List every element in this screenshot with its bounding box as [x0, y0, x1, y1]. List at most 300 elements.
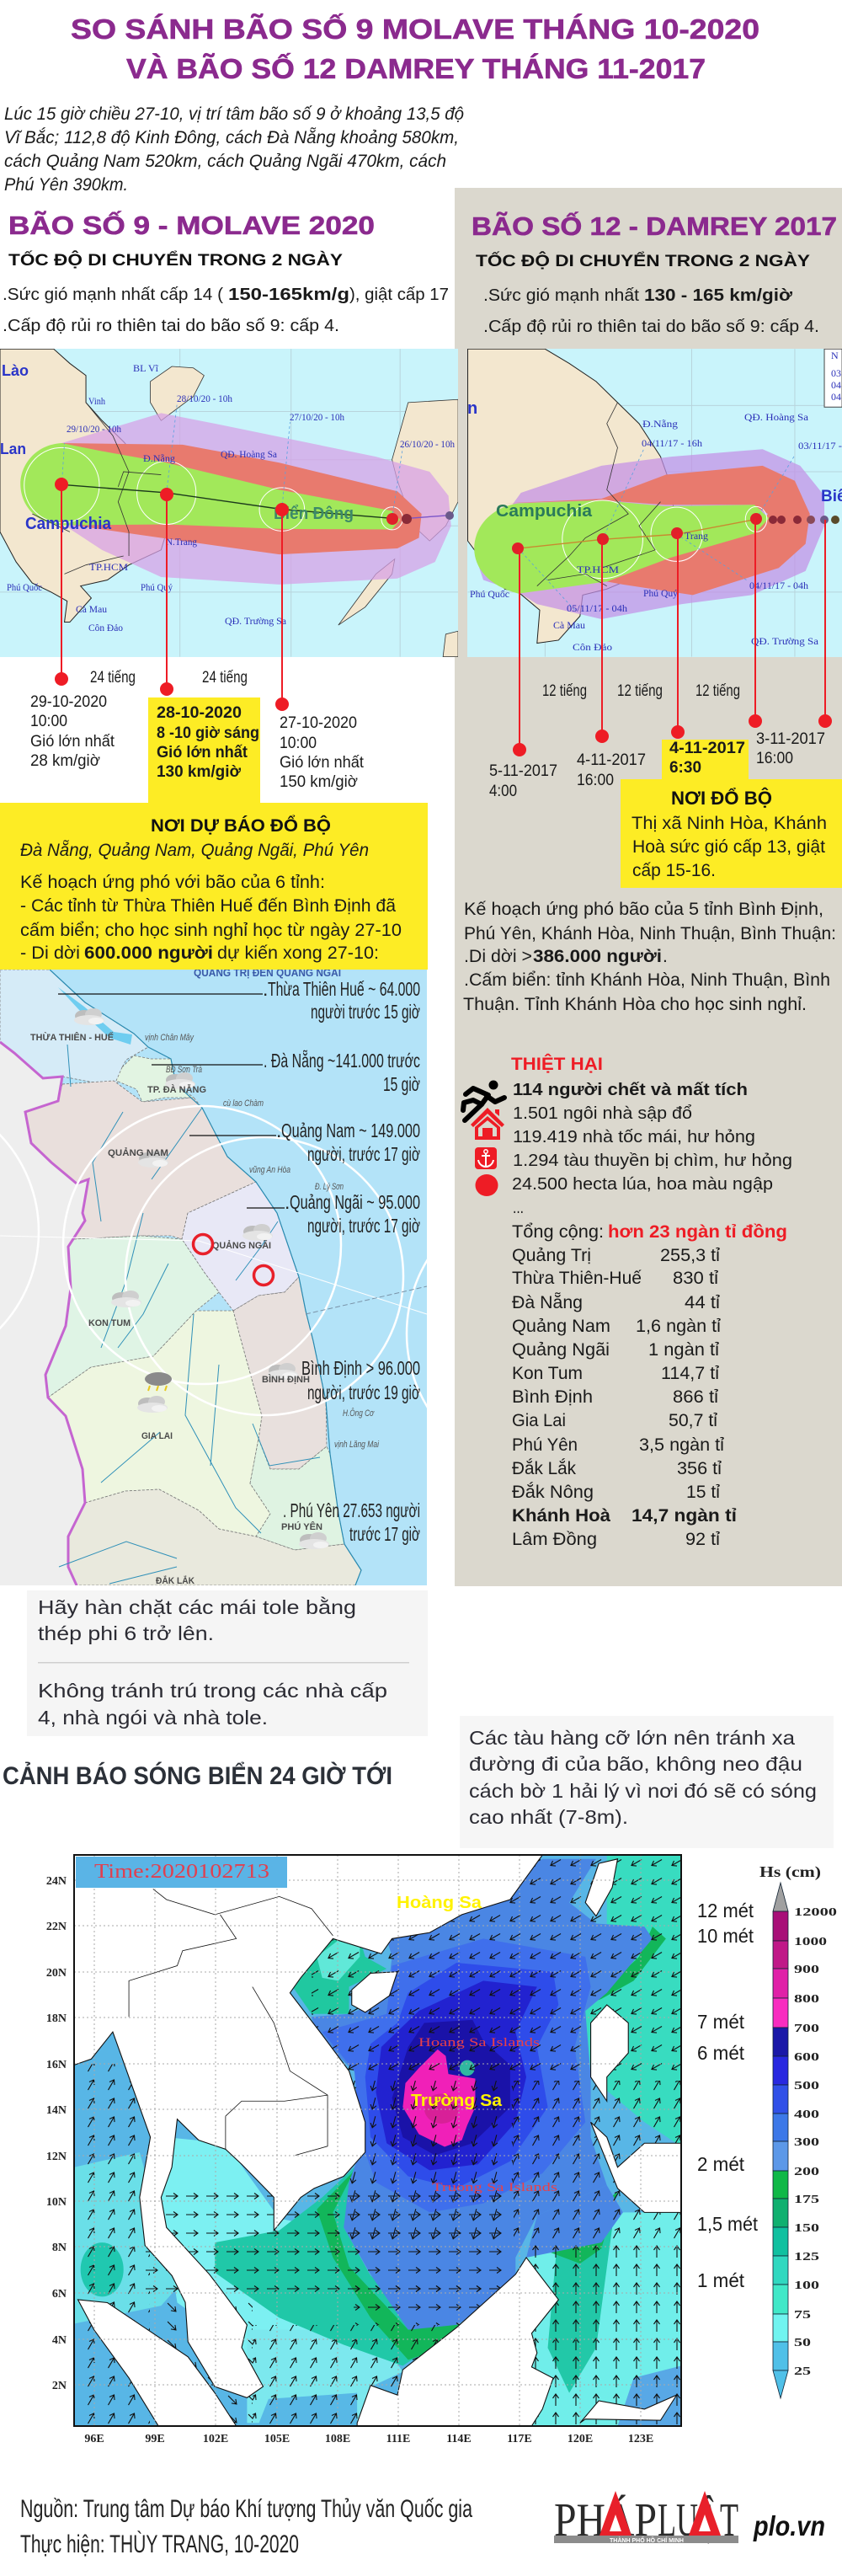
heading: Damrey: BÃO SỐ 12 - DAMREY 2017	[472, 211, 837, 241]
province labels: QUẢNG NGÃI	[212, 1240, 271, 1251]
icon: running person	[463, 1080, 504, 1120]
longitude labels: 105E	[264, 2433, 290, 2445]
coast	[50, 970, 361, 1585]
time box: Time:2020102713	[94, 1861, 269, 1883]
callout: roof advice: Hãy hàn chặt các mái tole bằng	[38, 1596, 356, 1618]
cost by province: Quảng Nam	[512, 1317, 610, 1336]
province labels: QUẢNG TRỊ ĐẾN QUẢNG NGÃI	[194, 966, 341, 979]
latitude labels: 16N	[46, 2059, 67, 2071]
map labels: Campuchia	[496, 502, 593, 521]
logo: Pháp Luật	[554, 2491, 738, 2547]
response plan: 600.000 người	[84, 943, 213, 963]
Damrey landfall text	[632, 788, 827, 880]
callout: roof advice: Không tránh trú trong các nhà cấp	[38, 1680, 387, 1702]
wind radius arcs	[0, 1105, 427, 1417]
longitude labels: 102E	[203, 2433, 228, 2445]
cost by province: 356 tỉ	[677, 1459, 722, 1478]
province labels: vũng An Hòa	[249, 1165, 290, 1175]
cost by province: 255,3 tỉ	[660, 1246, 720, 1265]
map labels: Trang	[685, 530, 708, 542]
intro text	[4, 104, 464, 195]
longitude labels: 114E	[446, 2433, 472, 2445]
duration labels: 24 tiếng	[90, 669, 136, 687]
cost by province: Kon Tum	[512, 1364, 583, 1383]
dots	[55, 478, 289, 711]
cost by province: 3,5 ngàn tỉ	[639, 1435, 724, 1455]
metre labels: 12 mét	[697, 1900, 754, 1921]
callout: roof advice: 4, nhà ngói và nhà tole.	[38, 1707, 268, 1729]
map labels: Lào	[2, 362, 29, 379]
legend: wave height colour bar	[697, 1863, 837, 2398]
longitude labels: 117E	[507, 2433, 532, 2445]
label: 29-10	[30, 693, 115, 770]
province labels: KON TUM	[88, 1318, 131, 1328]
latitude labels: 14N	[46, 2104, 67, 2117]
Damrey response plan: .Di dời >	[464, 947, 532, 966]
label: 28-10	[157, 704, 259, 781]
evacuation labels	[263, 978, 420, 1545]
cost by province: Quảng Trị	[512, 1246, 591, 1265]
icon: flooded field dot	[475, 1174, 498, 1196]
longitude labels: 108E	[325, 2433, 350, 2445]
longitude labels: 99E	[145, 2433, 165, 2445]
evacuation labels: Bình Định > 96.000	[301, 1357, 420, 1379]
map labels: Cà Mau	[76, 603, 107, 615]
map labels: 04/11/17 - 16h	[642, 437, 702, 449]
connector lines	[61, 484, 282, 704]
map labels: QĐ. Trường Sa	[751, 635, 819, 647]
scale values: 800	[794, 1993, 819, 2006]
label: 5-11: 4:00	[489, 783, 517, 800]
evacuation labels: Quảng Ngãi ~ 95.000	[290, 1191, 420, 1213]
scale values: 50	[794, 2337, 811, 2349]
map labels	[0, 362, 455, 633]
map labels: 28/10/20 - 10h	[177, 393, 232, 404]
scale values: 175	[794, 2194, 819, 2206]
label: 27-10	[280, 714, 365, 791]
map labels: 04/11/17 - 04h	[749, 580, 808, 591]
scale values: 25	[794, 2365, 811, 2378]
metre labels: 1,5 mét	[697, 2213, 759, 2235]
evacuation labels: người, trước 17 giờ	[307, 1143, 420, 1165]
panel: Damrey background	[455, 188, 842, 1586]
website label: plo.vn	[753, 2510, 825, 2541]
response plan	[20, 873, 402, 963]
Damrey response plan	[463, 900, 836, 1014]
damage list	[512, 1081, 792, 1217]
intro text: Vĩ Bắc; 112,8 độ Kinh Đông, cách Đà Nẵng khoảng 580km,	[4, 128, 459, 147]
metre labels: 2 mét	[697, 2153, 745, 2175]
title: SO SÁNH BÃO SỐ 9 MOLAVE THÁNG 10-2020	[71, 13, 759, 45]
label: 28-10: 28-10-2020	[157, 704, 242, 722]
map: evacuation by province	[0, 970, 427, 1585]
map labels: 26/10/20 - 10h	[400, 438, 455, 450]
wind arrows	[74, 1857, 681, 2426]
label: 4-11 6:30: 6:30	[669, 759, 701, 777]
grid lines	[74, 1855, 681, 2426]
map labels: QĐ. Trường Sa	[225, 615, 287, 627]
longitude labels: 111E	[386, 2433, 410, 2445]
evacuation labels: .	[285, 1191, 290, 1213]
label: 27-10: 27-10-2020	[280, 714, 357, 732]
label: 4-11 6:30	[669, 740, 745, 777]
map frame	[74, 1855, 681, 2426]
latitude labels: 20N	[46, 1967, 67, 1980]
latitude labels: 18N	[46, 2012, 67, 2025]
wind line: .Sức gió mạnh nhất cấp 14 (	[3, 286, 223, 304]
scale values: 400	[794, 2108, 819, 2121]
wind line	[483, 286, 793, 305]
evacuation labels: .	[276, 1120, 281, 1141]
latitude labels: 6N	[52, 2288, 67, 2301]
cost by province: 50,7 tỉ	[669, 1411, 717, 1430]
source credits: Nguồn: Trung tâm Dự báo Khí tượng Thủy văn Quốc gia	[20, 2495, 472, 2523]
rivers	[59, 1045, 320, 1584]
label: 27-10: 10:00	[280, 735, 317, 752]
map labels: n	[467, 399, 477, 418]
label: 3-11: 16:00	[756, 750, 793, 767]
subheading: Damrey speed: TỐC ĐỘ DI CHUYỂN TRONG 2 NGÀY	[476, 252, 810, 270]
metre labels	[697, 1900, 759, 2291]
Molave landfall text	[20, 815, 402, 963]
latitude labels: 12N	[46, 2151, 67, 2163]
label: 29-10: 29-10-2020	[30, 693, 107, 711]
evacuation labels: trước 17 giờ	[349, 1523, 420, 1545]
storm position markers	[194, 1235, 273, 1285]
latitude labels: 4N	[52, 2334, 67, 2347]
Damrey response plan: Kế hoạch ứng phó bão của 5 tỉnh Bình Định,	[464, 900, 823, 919]
longitude labels: 96E	[84, 2433, 104, 2445]
label: 29-10: 28 km/giờ	[30, 752, 100, 770]
map labels: N.Trang	[166, 536, 197, 548]
province labels	[30, 966, 379, 1586]
intro text: Phú Yên 390km.	[4, 175, 128, 195]
latitude labels: 22N	[46, 1921, 67, 1933]
cost by province: 15 tỉ	[686, 1483, 720, 1502]
track lines	[0, 1236, 427, 1314]
scale values: 75	[794, 2309, 811, 2322]
water bodies	[58, 987, 132, 1045]
cost by province: Quảng Ngãi	[512, 1340, 610, 1360]
scale values: 300	[794, 2136, 819, 2149]
cost by province: 44 tỉ	[685, 1293, 720, 1312]
label: 28-10: 130 km/giờ	[157, 763, 241, 781]
callout: ship advice: đường đi của bão, không neo đậu	[469, 1753, 802, 1775]
callout: ship advice: cao nhất (7-8m).	[469, 1806, 628, 1828]
scale values: 900	[794, 1964, 819, 1976]
cost by province: Phú Yên	[512, 1435, 578, 1455]
label: 4-11 16:00: 4-11-2017	[577, 751, 646, 769]
source credits	[20, 2495, 472, 2558]
total cost: Tổng cộng:	[512, 1222, 604, 1242]
sea labels	[397, 1894, 557, 2194]
evacuation labels: người, trước 19 giờ	[307, 1382, 420, 1403]
evacuation labels: người trước 15 giờ	[311, 1001, 420, 1023]
map labels: Côn Đảo	[573, 641, 612, 653]
scale values: 200	[794, 2166, 819, 2178]
total cost: hơn 23 ngàn tỉ đồng	[608, 1222, 787, 1242]
cost by province: Bình Định	[512, 1387, 593, 1407]
map labels: Côn Đảo	[88, 622, 123, 633]
province labels: BÌNH ĐỊNH	[262, 1374, 310, 1385]
label: 4-11 16:00	[577, 751, 646, 789]
map labels: TP.HCM	[89, 561, 128, 573]
cost by province: 1,6 ngàn tỉ	[636, 1317, 721, 1336]
risk line: .Cấp độ rủi ro thiên tai do bão số 9: cấp 4.	[483, 318, 819, 336]
map labels: Đ.Nẵng	[642, 418, 678, 430]
legend title: Hs (cm)	[759, 1863, 821, 1881]
label: 3-11	[756, 730, 825, 767]
wind line: ), giật cấp 17	[349, 286, 449, 304]
sea labels: Trường Sa	[411, 2092, 503, 2110]
source credits: Thực hiện: THÙY TRANG, 10-2020	[20, 2531, 299, 2558]
cost by province: 866 tỉ	[673, 1387, 718, 1407]
cost by province: Gia Lai	[512, 1411, 566, 1430]
label: 28-10: Gió lớn nhất	[157, 744, 248, 762]
evacuation labels: . Đà Nẵng ~141.000 trước	[264, 1049, 420, 1072]
logo: Pháp Luật: THÀNH PHỐ HỒ CHÍ MINH	[610, 2536, 684, 2544]
wind line: 130 - 165 km/giờ	[644, 286, 793, 305]
cost by province: 1 ngàn tỉ	[648, 1340, 719, 1360]
longitude labels	[84, 2433, 653, 2445]
map labels: Vinh	[88, 395, 105, 407]
province labels: cù lao Chàm	[223, 1098, 264, 1109]
province labels: BĐ Sơn Trà	[166, 1065, 202, 1075]
connector lines	[520, 519, 825, 750]
country border	[0, 1042, 88, 1585]
storm icons	[386, 511, 454, 525]
wind line	[3, 286, 449, 304]
response plan: Kế hoạch ứng phó với bão của 6 tỉnh:	[20, 873, 325, 892]
province labels: vịnh Chân Mây	[145, 1033, 195, 1043]
latitude labels: 24N	[46, 1875, 67, 1888]
metre labels: 1 mét	[697, 2269, 745, 2291]
metre labels: 6 mét	[697, 2042, 745, 2064]
heading: wave warning: CẢNH BÁO SÓNG BIỂN 24 GIỜ TỚI	[3, 1761, 392, 1790]
province labels: PHÚ YÊN	[281, 1521, 322, 1532]
map: Damrey forecast track	[467, 349, 842, 657]
duration labels: 12 tiếng	[542, 682, 587, 700]
evacuation labels: 15 giờ	[383, 1073, 420, 1095]
title	[71, 13, 759, 84]
icon: anchor	[475, 1147, 497, 1169]
label: 27-10: Gió lớn nhất	[280, 754, 365, 772]
province labels: TP. ĐÀ NẴNG	[147, 1084, 206, 1095]
panel: Molave header	[3, 210, 449, 335]
map labels: 04	[831, 391, 841, 403]
map labels: Phú Quý	[643, 587, 678, 599]
land masses	[74, 1855, 681, 2426]
landfall description: cấp 15-16.	[632, 861, 716, 880]
province labels: GIA LAI	[141, 1431, 173, 1441]
landfall description: Thị xã Ninh Hòa, Khánh	[632, 814, 827, 833]
map labels: 04	[831, 379, 841, 391]
map labels	[467, 350, 842, 653]
cost by province: 92 tỉ	[685, 1530, 720, 1549]
evacuation labels: . Phú Yên 27.653 người	[283, 1499, 420, 1521]
map labels: 27/10/20 - 10h	[290, 411, 344, 423]
Damrey response plan: Thuận. Tỉnh Khánh Hòa cho học sinh nghỉ.	[463, 995, 807, 1014]
response plan: - Các tỉnh từ Thừa Thiên Huế đến Bình Định đã	[20, 896, 396, 916]
yellow block: Molave landfall	[0, 697, 428, 970]
response plan: dự kiến xong 27-10:	[217, 943, 379, 963]
province labels: Đ. Lý Sơn	[315, 1182, 344, 1192]
cost by province: 114,7 tỉ	[661, 1364, 719, 1383]
risk line: .Cấp độ rủi ro thiên tai do bão số 9: cấp 4.	[3, 317, 339, 335]
cost by province	[512, 1246, 737, 1549]
scale values: 500	[794, 2080, 819, 2092]
Damrey response plan: Phú Yên, Khánh Hòa, Ninh Thuận, Bình Thuận:	[464, 924, 836, 943]
label: 5-11	[489, 762, 557, 800]
map labels: 05/11/17 - 04h	[567, 602, 627, 614]
duration labels: 12 tiếng	[695, 682, 740, 700]
label: 28-10: 8 -10 giờ sáng	[157, 724, 259, 742]
map labels: N	[831, 350, 839, 361]
provinces	[0, 970, 361, 1585]
evacuation labels: Quảng Nam ~ 149.000	[281, 1120, 420, 1141]
metre labels: 10 mét	[697, 1925, 754, 1947]
sea labels: Truong Sa Islands	[432, 2181, 557, 2194]
map labels: Phú Quốc	[470, 588, 509, 600]
cost by province: 14,7 ngàn tỉ	[632, 1506, 737, 1526]
duration labels	[90, 669, 248, 687]
storm icons	[512, 513, 839, 554]
sea labels: Hoàng Sa	[397, 1894, 482, 1912]
heading: Molave: BÃO SỐ 9 - MOLAVE 2020	[8, 210, 375, 240]
province labels: QUẢNG NAM	[108, 1147, 168, 1158]
map labels: Đ.Nẵng	[143, 452, 175, 464]
label: 5-11: 5-11-2017	[489, 762, 557, 780]
time box	[76, 1857, 287, 1888]
response plan: cấm biển; cho học sinh nghỉ học từ ngày 27-10	[20, 921, 402, 940]
title: VÀ BÃO SỐ 12 DAMREY THÁNG 11-2017	[126, 52, 706, 84]
panel: Damrey header	[472, 211, 837, 336]
cost by province: Khánh Hoà	[512, 1506, 610, 1526]
map labels: Biển Đông	[274, 505, 354, 523]
clouds	[74, 1008, 329, 1549]
landfall description	[632, 814, 827, 880]
sea labels: Hoang Sa Islands	[418, 2036, 540, 2050]
map labels: Phú Quốc	[7, 581, 42, 593]
callout: ship advice	[460, 1716, 834, 1848]
scale values: 700	[794, 2023, 819, 2035]
duration labels: 24 tiếng	[202, 669, 248, 687]
wind line: 150-165km/g	[228, 286, 349, 304]
dots	[513, 714, 832, 756]
map: Molave forecast track	[0, 349, 458, 657]
province labels: H.Ông Cơ	[343, 1408, 375, 1419]
callout: ship advice: cách bờ 1 hải lý vì nơi đó sẽ có sóng	[469, 1780, 817, 1802]
map labels: QĐ. Hoàng Sa	[744, 411, 809, 423]
landfall description: Hoà sức gió cấp 13, giật	[632, 837, 825, 857]
callout: ship advice: Các tàu hàng cỡ lớn nên tránh xa	[469, 1727, 795, 1749]
damage heading: THIỆT HẠI	[511, 1054, 603, 1074]
response plan: - Di dời	[20, 943, 80, 963]
label: 29-10: Gió lớn nhất	[30, 733, 115, 751]
label: 29-10: 10:00	[30, 713, 67, 730]
logo: Pháp Luật: LUẬT	[658, 2494, 738, 2547]
subheading: Molave speed: TỐC ĐỘ DI CHUYỂN TRONG 2 NGÀY	[8, 251, 343, 270]
Damrey response plan: .Cấm biển: tỉnh Khánh Hòa, Ninh Thuận, Bình	[464, 970, 830, 990]
landfall provinces: Đà Nẵng, Quảng Nam, Quảng Ngãi, Phú Yên	[20, 841, 369, 860]
map labels: TP.HCM	[577, 564, 619, 575]
timeline: Damrey	[489, 519, 832, 800]
callout: roof advice	[27, 1590, 428, 1736]
latitude labels: 10N	[46, 2196, 67, 2209]
Damrey response plan: 386.000 người	[533, 947, 662, 966]
evacuation labels: Thừa Thiên Huế ~ 64.000	[268, 978, 420, 1000]
scale values: 125	[794, 2251, 819, 2263]
label: 4-11 16:00: 16:00	[577, 772, 614, 789]
scale values: 150	[794, 2222, 819, 2235]
longitude labels: 123E	[628, 2433, 653, 2445]
evacuation labels: người, trước 17 giờ	[307, 1215, 420, 1237]
map labels: QĐ. Hoàng Sa	[221, 448, 278, 460]
leader lines	[58, 994, 285, 1208]
map labels: 03/11/17 -	[798, 440, 842, 452]
map labels: Lan	[0, 441, 26, 457]
latitude labels: 2N	[52, 2380, 67, 2392]
laos side	[0, 1042, 88, 1585]
damage list: 1.294 tàu thuyền bị chìm, hư hỏng	[513, 1152, 792, 1170]
damage list: 114 người chết và mất tích	[513, 1081, 748, 1099]
metre labels: 7 mét	[697, 2011, 745, 2033]
timeline: Molave	[30, 478, 365, 791]
latitude labels: 8N	[52, 2242, 67, 2254]
province labels: THỪA THIÊN - HUẾ	[30, 1032, 114, 1043]
scale values: 1000	[794, 1936, 827, 1948]
intro text: cách Quảng Nam 520km, cách Quảng Ngãi 470km, cách	[4, 152, 446, 171]
damage list: 1.501 ngôi nhà sập đổ	[513, 1104, 692, 1123]
label: 3-11: 3-11-2017	[756, 730, 825, 748]
damage list: 24.500 hecta lúa, hoa màu ngập	[512, 1175, 773, 1194]
label: 4-11 6:30: 4-11-2017	[669, 740, 745, 757]
scale values: 100	[794, 2279, 819, 2292]
panel: damage	[463, 1054, 792, 1549]
scale values: 12000	[794, 1906, 837, 1919]
yellow block: Damrey landfall	[621, 740, 842, 888]
longitude labels: 120E	[568, 2433, 593, 2445]
duration labels: 12 tiếng	[617, 682, 663, 700]
damage list: ...	[513, 1199, 524, 1217]
heading: NƠI ĐỔ BỘ	[671, 788, 772, 809]
colour bands	[773, 1883, 788, 2398]
province labels: vịnh Lăng Mai	[334, 1440, 379, 1450]
cost by province: Đà Nẵng	[512, 1293, 583, 1312]
cost by province: Đắk Lắk	[512, 1459, 576, 1478]
cost by province: Đắk Nông	[512, 1483, 594, 1502]
heading: NƠI DỰ BÁO ĐỔ BỘ	[151, 815, 331, 836]
callout: roof advice: thép phi 6 trở lên.	[38, 1622, 214, 1644]
map labels: Campuchia	[25, 515, 112, 533]
Damrey response plan: .	[663, 947, 668, 966]
map labels: Cà Mau	[553, 619, 585, 631]
label: 27-10: 150 km/giờ	[280, 773, 358, 791]
duration labels	[542, 682, 740, 700]
latitude labels	[46, 1875, 67, 2392]
damage list: 119.419 nhà tốc mái, hư hỏng	[513, 1128, 755, 1146]
chart: wave height map	[46, 1855, 681, 2445]
intro text: Lúc 15 giờ chiều 27-10, vị trí tâm bão số 9 ở khoảng 13,5 độ	[4, 104, 464, 124]
map labels: 29/10/20 - 10h	[67, 423, 121, 435]
map labels: 03	[831, 367, 841, 379]
cost by province: 830 tỉ	[673, 1269, 718, 1288]
map labels: BL Vĩ	[133, 362, 159, 374]
province labels: ĐẮK LẮK	[156, 1575, 195, 1586]
icon: house	[471, 1108, 504, 1140]
logo: Pháp Luật: PHÁP	[554, 2494, 657, 2547]
scale values: 600	[794, 2051, 819, 2064]
